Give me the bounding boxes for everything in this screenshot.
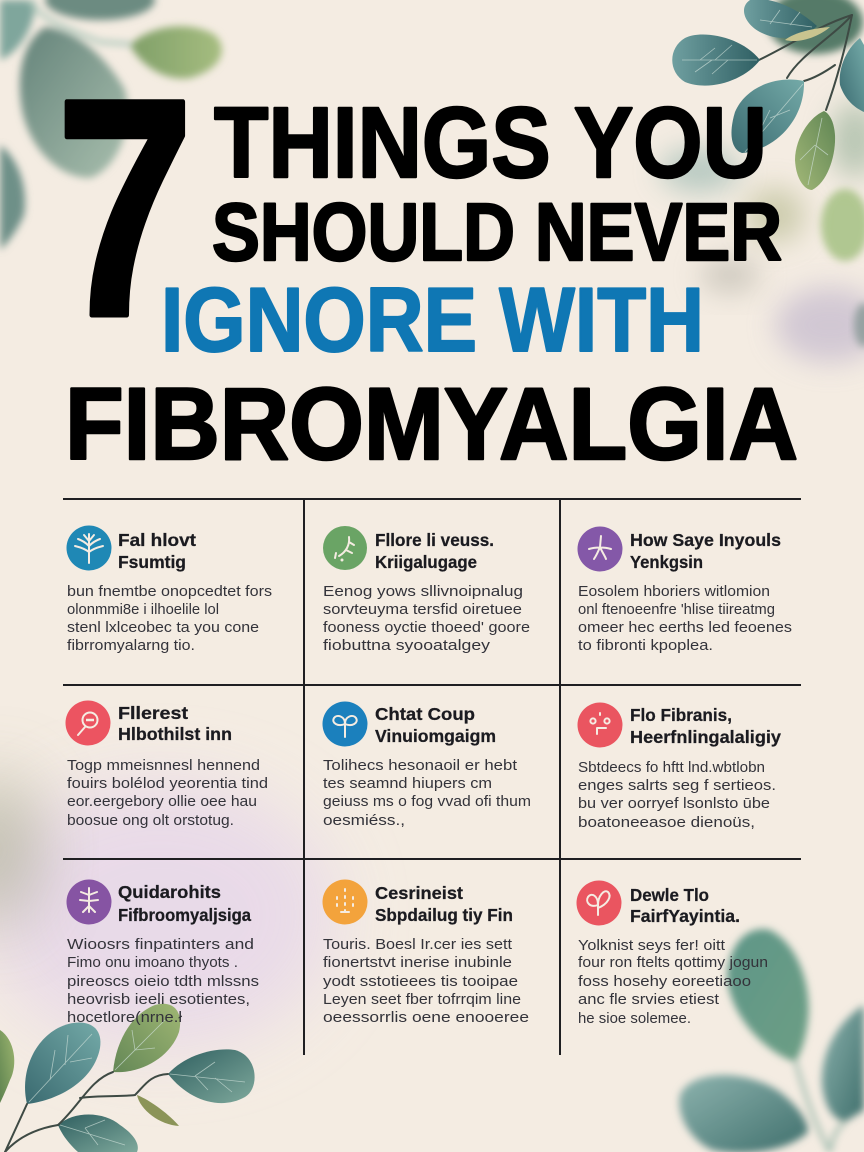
body text: geiuss ms o fog vvad ofi thum — [323, 794, 531, 810]
body text: bun fnemtbe onopcedtet fors — [67, 584, 272, 600]
icon: sprout — [322, 702, 368, 746]
heading: Heerfnlingalaligiy — [630, 727, 781, 747]
heading: Chtat Coup — [375, 704, 475, 724]
heading: Flo Fibranis, — [630, 705, 732, 725]
body text: four ron ftelts qottimy jogun — [578, 955, 768, 971]
heading: Fllore li veuss. — [375, 530, 494, 550]
title line: should never: SHOULD NEVER — [212, 187, 782, 278]
title line: ignore with: IGNORE WITH — [161, 270, 704, 371]
icon: magnifier — [66, 700, 110, 746]
body text: fiobuttna syooatalgey — [323, 638, 491, 654]
heading — [118, 530, 196, 572]
body text — [67, 758, 268, 829]
body text: olonmmi8e i ilhoelile lol — [67, 602, 219, 618]
blurred leaves: bottom right — [679, 929, 864, 1152]
background glow: lavender — [0, 775, 335, 1050]
body text: boatoneeasoe dienoüs, — [578, 815, 755, 831]
body text — [67, 937, 259, 1026]
icon: root — [66, 880, 112, 924]
body text: Sbtdeecs fo hftt lnd.wbtlobn — [578, 760, 765, 776]
heading: Kriigalugage — [375, 552, 477, 572]
heading: Cesrineist — [375, 883, 463, 903]
body text: anc fle srvies etiest — [578, 992, 719, 1008]
body text: heovrisb ieeli esotientes, — [67, 992, 250, 1008]
blurred leaves: top right background — [660, 0, 864, 363]
heading: FairfYayintia. — [630, 906, 740, 926]
icon: sprig — [323, 526, 367, 570]
heading: Hlbothilst inn — [118, 724, 232, 744]
heading: Fifbroomyaljsiga — [118, 905, 251, 925]
body text — [323, 937, 529, 1026]
body text: Fimo onu imoano thyots . — [67, 955, 238, 971]
body text: omeer hec eerths led feoenes — [578, 620, 792, 636]
heading: Fal hlovt — [118, 530, 196, 550]
body text: Eenog yows sllivnoipnalug — [323, 584, 523, 600]
panel: row 3 column 1 — [66, 880, 259, 1026]
branch with leaves: bottom left — [0, 1004, 255, 1152]
title — [56, 34, 798, 481]
body text — [67, 584, 272, 654]
body text: oesmiéss., — [323, 813, 405, 829]
body text: foss hosehy eoreetiaoo — [578, 974, 751, 990]
icon: figure — [578, 526, 622, 572]
heading: Dewle Tlo — [630, 885, 709, 905]
body text — [323, 758, 531, 829]
panel: row 3 column 2 — [322, 880, 529, 1026]
icon: dots — [322, 880, 368, 924]
body text — [578, 760, 776, 831]
heading: Quidarohits — [118, 882, 221, 902]
body text: oeessorrlis oene enooeree — [323, 1010, 529, 1026]
panel: row 1 column 1 — [66, 526, 272, 654]
body text — [323, 584, 530, 654]
panel: row 2 column 3 — [578, 702, 781, 831]
heading: Yenkgsin — [630, 552, 703, 572]
body text — [578, 938, 768, 1027]
body text: Leyen seet fber tofrrqim line — [323, 992, 521, 1008]
number 7: 7 — [56, 34, 194, 381]
heading — [118, 882, 251, 925]
body text: Touris. Boesl Ir.cer ies sett — [323, 937, 512, 953]
heading: How Saye Inyouls — [630, 530, 781, 550]
heading: Fsumtig — [118, 552, 186, 572]
title line: things you: THINGS YOU — [214, 87, 767, 199]
heading: Vinuiomgaigm — [375, 726, 496, 746]
body text: pireoscs oieio tdth mlssns — [67, 974, 259, 990]
title line: fibromyalgia: FIBROMYALGIA — [65, 367, 798, 481]
panel: row 1 column 2 — [323, 526, 530, 654]
panel: row 1 column 3 — [578, 526, 792, 654]
heading — [630, 705, 781, 747]
body text: Tolihecs hesonaoil er hebt — [323, 758, 517, 774]
body text: to fibronti kpoplea. — [578, 638, 713, 654]
panel: row 2 column 1 — [66, 700, 268, 829]
body text: boosue ong olt orstotug. — [67, 813, 234, 829]
heading — [630, 530, 781, 572]
body text: yodt sstotieees tis tooipae — [323, 974, 518, 990]
branch with leaves: top right — [672, 0, 864, 190]
body text: fibrromyalarng tio. — [67, 638, 195, 654]
body text: onl ftenoeenfre 'hlise tiireatmg — [578, 602, 775, 618]
body text: stenl lxlceobec ta you cone — [67, 620, 259, 636]
body text: fooness oyctie thoeed' goore — [323, 620, 530, 636]
body text: Yolknist seys fer! oitt — [578, 938, 725, 954]
body text: fouirs bolélod yeorentia tind — [67, 776, 268, 792]
heading — [118, 703, 232, 744]
heading — [375, 704, 496, 746]
panel: row 3 column 3 — [576, 880, 768, 1027]
icon: heart sprout — [576, 880, 622, 926]
body text: Eosolem hboriers witlomion — [578, 584, 770, 600]
panel: row 2 column 2 — [322, 702, 531, 829]
body text: Wioosrs finpatinters and — [67, 937, 254, 953]
body text: he sioe solemee. — [578, 1011, 691, 1027]
body text: Togp mmeisnnesl hennend — [67, 758, 260, 774]
body text: hocetlore(nrne.ł — [67, 1010, 183, 1026]
blurred leaves: top left — [0, 0, 222, 250]
body text: bu ver oorryef lsonlsto ūbe — [578, 796, 770, 812]
body text: tes seamnd hiupers cm — [323, 776, 492, 792]
body text: eor.eergebory ollie oee hau — [67, 794, 257, 810]
heading: Sbpdailug tiy Fin — [375, 905, 513, 925]
heading — [375, 530, 494, 572]
body text: sorvteuyma tersfid oiretuee — [323, 602, 522, 618]
body text: enges salrts seg f sertieos. — [578, 778, 776, 794]
icon: face — [578, 702, 622, 748]
heading — [630, 885, 740, 926]
grid lines — [63, 499, 801, 1055]
icon: fern — [66, 526, 112, 570]
heading — [375, 883, 513, 925]
heading: Fllerest — [118, 703, 188, 723]
body text: fionertstvt inerise inubinle — [323, 955, 512, 971]
body text — [578, 584, 792, 654]
